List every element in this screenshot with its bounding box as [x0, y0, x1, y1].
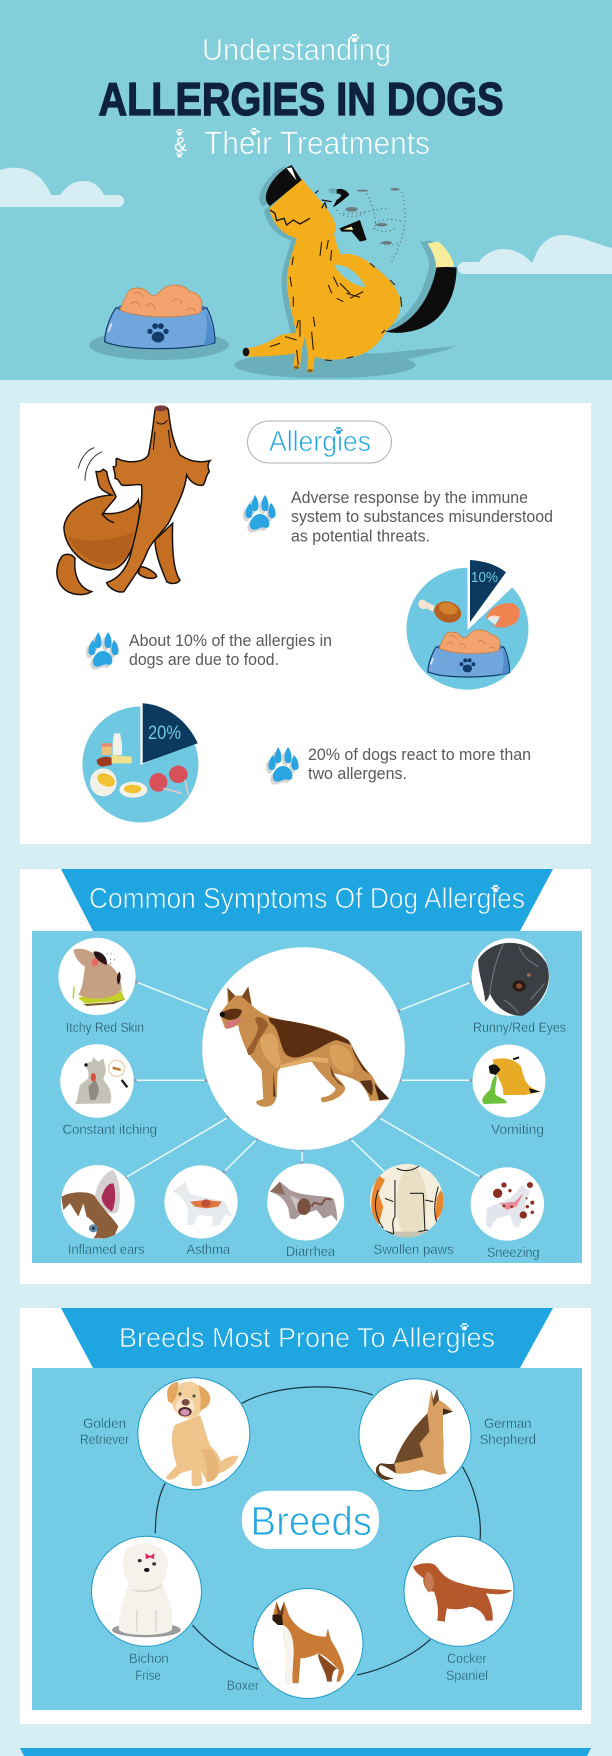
breed: Bichon Frise [92, 1536, 202, 1646]
symptom: constant itching [60, 1044, 134, 1118]
breed: Boxer [253, 1588, 363, 1698]
symptom: diarrhea [267, 1164, 344, 1240]
chart: 10 percent food pie [406, 560, 528, 690]
cloud: right [458, 235, 612, 274]
chart: 10 percent food pie: 10% [471, 569, 498, 586]
icon: paw 1 [243, 495, 276, 533]
label: Golden Retriever [80, 1415, 129, 1447]
symptom: runny red eyes [472, 938, 549, 1016]
panel: common symptoms [20, 869, 591, 1284]
flea specks [337, 192, 405, 262]
text: adverse response: system to substances misunderstood [291, 508, 553, 526]
icon: salmon steak [486, 603, 521, 628]
center pill: Breeds: Breeds [250, 1498, 372, 1544]
ribbon heading [61, 1308, 553, 1368]
illustration: scratching yellow dog [234, 165, 457, 378]
title: and Their Treatments: & [174, 134, 188, 156]
fur strokes [270, 240, 402, 365]
label: Golden Retriever: Golden [83, 1415, 126, 1431]
label: Bichon Frise: Frise [135, 1667, 161, 1683]
label: German Shepherd: German [484, 1415, 532, 1431]
text: twenty percent [308, 746, 531, 783]
symptom: itchy red skin [58, 938, 136, 1015]
label: Inflamed ears: Inflamed ears [68, 1241, 144, 1257]
label: Cocker Spaniel: Spaniel [446, 1667, 488, 1683]
connector dots [124, 980, 483, 1180]
label: Bichon Frise [129, 1650, 169, 1683]
text: adverse response: Adverse response by the immune [291, 489, 528, 507]
icon: paw 3 [266, 747, 299, 785]
symptom: asthma [164, 1165, 238, 1239]
text: ten percent food: dogs are due to food. [129, 651, 279, 669]
breed: Cocker Spaniel [404, 1536, 514, 1646]
icon: food bowl [89, 285, 229, 360]
heading pill: Allergies: Allergies [269, 426, 371, 458]
text: adverse response [291, 489, 553, 546]
text: adverse response: as potential threats. [291, 528, 430, 546]
panel: allergies card [20, 403, 591, 844]
text: twenty percent: 20% of dogs react to more than [308, 746, 531, 764]
heading pill: Allergies [248, 421, 392, 463]
label: Runny/Red Eyes: Runny/Red Eyes [473, 1019, 566, 1035]
text: twenty percent: two allergens. [308, 765, 407, 783]
breed: golden retriever [138, 1378, 250, 1490]
label: Asthma: Asthma [186, 1241, 230, 1257]
icon: small food bowl [428, 630, 510, 677]
icon: paw 2 [86, 632, 119, 670]
text: ten percent food: About 10% of the allergies in [129, 632, 332, 650]
label: German Shepherd [480, 1415, 536, 1447]
label: Diarrhea: Diarrhea [286, 1243, 335, 1259]
label: Vomiting: Vomiting [491, 1121, 544, 1137]
label: Itchy Red Skin: Itchy Red Skin [66, 1019, 144, 1035]
breed: German shepherd [359, 1379, 471, 1491]
chart: 20 percent allergen pie: 20% [148, 723, 181, 744]
icon: boiled eggs [90, 768, 147, 798]
symptom: swollen paws [370, 1164, 445, 1240]
label: Cocker Spaniel [446, 1650, 488, 1683]
label: Golden Retriever: Retriever [80, 1431, 129, 1447]
icon: lamb chops [149, 766, 188, 795]
title: and Their Treatments: Their Treatments [204, 125, 430, 161]
panel: hero header [0, 0, 612, 380]
panel: breeds [20, 1308, 591, 1724]
cloud: left [0, 168, 124, 207]
ribbon heading [61, 869, 553, 931]
connecting ring arcs [155, 1387, 480, 1675]
ribbon heading: Breeds Most Prone To Allergies [119, 1322, 495, 1353]
label: German Shepherd: Shepherd [480, 1431, 536, 1447]
center circle with German shepherd [202, 947, 405, 1150]
next section ribbon edge [20, 1748, 591, 1756]
label: Bichon Frise: Bichon [129, 1650, 169, 1666]
symptom: inflamed ears [61, 1165, 135, 1239]
label: Constant itching: Constant itching [62, 1121, 157, 1137]
title: Allergies in Dogs: ALLERGIES IN DOGS [98, 73, 504, 125]
label: Sneezing: Sneezing [487, 1244, 540, 1260]
connector lines [126, 982, 481, 1178]
title: Understanding: Understanding [202, 32, 391, 67]
symptom: sneezing [471, 1167, 544, 1241]
icon: dairy items [97, 733, 132, 767]
text: ten percent food [129, 632, 332, 669]
icon: drumstick [418, 598, 464, 626]
illustration: howling brown dog [57, 405, 210, 595]
label: Boxer: Boxer [227, 1677, 259, 1693]
label: Cocker Spaniel: Cocker [447, 1650, 487, 1666]
ribbon heading: Common Symptoms Of Dog Allergies [89, 883, 525, 915]
chart: 20 percent allergen pie [82, 700, 205, 822]
symptom: vomiting [472, 1044, 546, 1118]
label: Swollen paws: Swollen paws [374, 1241, 454, 1257]
